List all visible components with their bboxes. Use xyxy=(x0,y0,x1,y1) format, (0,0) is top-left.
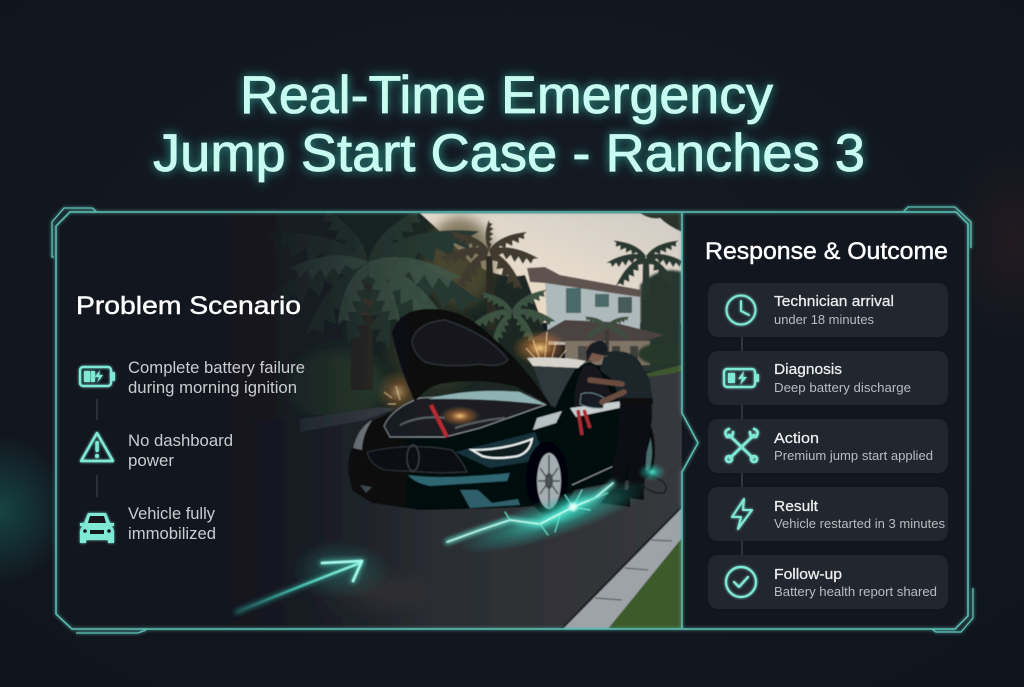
card: result xyxy=(708,487,948,541)
car rear wheel xyxy=(644,426,656,478)
door window xyxy=(574,364,612,406)
item: vehicle immobilized: Vehicle fully xyxy=(128,504,215,523)
electric lightning on road xyxy=(442,464,665,551)
icon: car xyxy=(80,513,114,543)
grille xyxy=(367,446,467,473)
forearms xyxy=(590,380,624,402)
item: battery failure: Complete battery failure xyxy=(128,358,305,377)
windscreen xyxy=(533,366,576,408)
card: technician arrival: Technician arrival xyxy=(774,294,894,310)
card: action: Action xyxy=(774,431,819,447)
icon: warning triangle xyxy=(81,433,113,461)
card: action xyxy=(708,419,948,473)
title: Real-Time Emergency xyxy=(240,66,773,125)
card: result: Result xyxy=(774,499,818,515)
item: no dashboard power: power xyxy=(128,451,174,470)
hedges and lawn xyxy=(637,343,682,378)
card: diagnosis: Deep battery discharge xyxy=(774,380,911,395)
icon: battery xyxy=(724,369,759,387)
torso xyxy=(606,351,653,404)
heading: response and outcome: Response & Outcome xyxy=(705,238,948,265)
cable on road xyxy=(642,476,666,493)
connector lines: problem list xyxy=(96,399,98,497)
title: Jump Start Case - Ranches 3 xyxy=(153,124,865,183)
frame: glowing panel border xyxy=(52,207,973,633)
card: diagnosis xyxy=(708,351,948,405)
card: result: Vehicle restarted in 3 minutes xyxy=(774,516,945,531)
door chrome highlights xyxy=(570,401,624,417)
panel: main card base xyxy=(56,212,968,629)
card: action: Premium jump start applied xyxy=(774,448,933,463)
card: follow-up: Battery health report shared xyxy=(774,584,937,599)
corner foliage xyxy=(640,213,682,232)
photo: car roadside scene xyxy=(230,201,686,629)
item: vehicle immobilized xyxy=(128,504,216,543)
small garden palm xyxy=(584,316,630,352)
list: problem items xyxy=(128,358,305,543)
photo palm trees xyxy=(290,213,682,390)
head xyxy=(586,342,604,362)
item: no dashboard power: No dashboard xyxy=(128,431,233,450)
title xyxy=(153,66,865,183)
roof xyxy=(527,357,586,368)
right palm xyxy=(606,240,682,286)
icon: clock xyxy=(726,296,756,324)
photo backdrop of trees xyxy=(230,213,682,420)
bumper teal highlights xyxy=(408,473,510,486)
car xyxy=(348,309,655,514)
heading: problem scenario: Problem Scenario xyxy=(76,292,301,320)
engine bay xyxy=(384,392,545,437)
palm in front of house xyxy=(474,289,556,344)
large palm xyxy=(308,213,479,390)
icon: crossed wrenches xyxy=(725,429,758,462)
icon: check circle xyxy=(726,567,756,597)
headlight xyxy=(472,439,532,458)
item: battery failure xyxy=(128,358,305,397)
left fade overlay xyxy=(230,213,420,629)
icon: battery xyxy=(80,367,115,386)
card: follow-up xyxy=(708,555,948,609)
sparks xyxy=(376,330,568,414)
mid palm silhouette xyxy=(439,220,539,330)
photo road and kerb xyxy=(230,372,682,629)
sky xyxy=(410,213,682,323)
connector lines: response steps xyxy=(741,337,743,555)
technician xyxy=(586,341,653,507)
front wheel xyxy=(526,442,568,514)
legs xyxy=(606,403,652,495)
sleeve xyxy=(600,356,624,382)
side mirror xyxy=(580,393,604,408)
card: technician arrival: under 18 minutes xyxy=(774,312,874,327)
left headlamp glow xyxy=(353,420,372,450)
boots xyxy=(600,488,644,507)
icon: lightning bolt xyxy=(732,499,752,529)
panel: response and outcome background xyxy=(682,213,967,628)
fender reflection xyxy=(455,432,540,468)
card: diagnosis: Diagnosis xyxy=(774,362,842,378)
item: no dashboard power xyxy=(128,431,233,470)
open hood xyxy=(392,309,552,407)
car body xyxy=(348,362,652,510)
glowing road arrow xyxy=(237,540,390,612)
photo house xyxy=(527,267,664,365)
card: follow-up: Follow-up xyxy=(774,567,842,583)
item: vehicle immobilized: immobilized xyxy=(128,524,216,543)
item: battery failure: during morning ignition xyxy=(128,378,297,397)
card: technician arrival xyxy=(708,283,948,337)
